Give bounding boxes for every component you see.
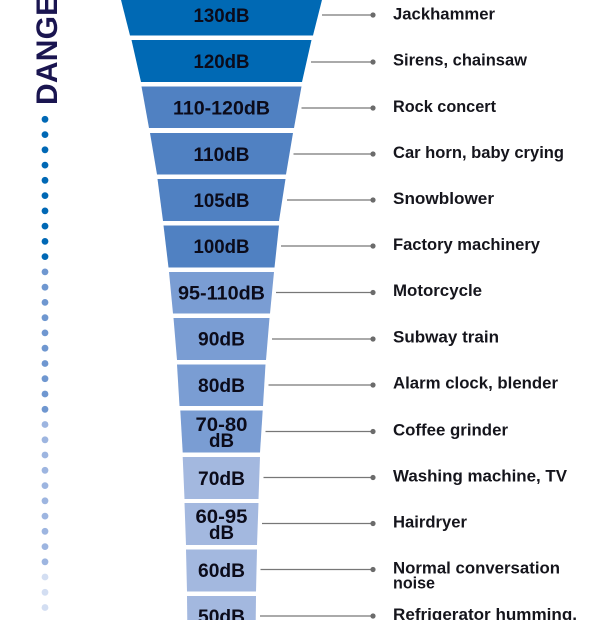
row: 110-120dB Rock concert (142, 86, 496, 128)
row: 105dB Snowblower: 105dB (194, 191, 250, 212)
row: 95-110dB Motorcycle: 95-110dB (178, 284, 265, 304)
row: 70dB Washing machine, TV (183, 457, 568, 499)
row: 70dB Washing machine, TV: Washing machine, TV (393, 466, 568, 486)
row: 110dB Car horn, baby crying: Car horn, baby crying (393, 143, 564, 162)
row: 60-95dB Hairdryer (184, 503, 467, 545)
row: 90dB Subway train: Subway train (393, 328, 499, 346)
row: 95-110dB Motorcycle (169, 272, 482, 314)
row: 70-80dB Coffee grinder: dB (209, 431, 234, 452)
row: 110-120dB Rock concert: Rock concert (393, 97, 496, 116)
row: 60-95dB Hairdryer: 60-95 (196, 507, 248, 528)
row: 60dB Normal conversation noise: noise (393, 574, 435, 592)
row: 80dB Alarm clock, blender: 80dB (198, 376, 245, 397)
row: 60dB Normal conversation noise: 60dB (198, 561, 245, 582)
row: 100dB Factory machinery: Factory machinery (393, 235, 541, 254)
row: 90dB Subway train (174, 318, 499, 360)
row: 90dB Subway train: 90dB (198, 330, 245, 350)
row: 130dB Jackhammer: 130dB (194, 6, 250, 27)
row: 80dB Alarm clock, blender (177, 364, 558, 406)
row: 60-95dB Hairdryer: dB (209, 523, 234, 544)
row: 80dB Alarm clock, blender: Alarm clock, blender (393, 374, 558, 392)
row: 110-120dB Rock concert: 110-120dB (173, 98, 270, 120)
row: 70dB Washing machine, TV: 70dB (198, 469, 245, 490)
row: 120dB Sirens, chainsaw: 120dB (194, 52, 250, 73)
row: 95-110dB Motorcycle: Motorcycle (393, 281, 482, 300)
row: 60dB Normal conversation noise: Normal conversation (393, 558, 560, 577)
row: 70-80dB Coffee grinder (180, 410, 508, 452)
row: 100dB Factory machinery (164, 226, 541, 268)
row: 70-80dB Coffee grinder: Coffee grinder (393, 420, 508, 440)
row: 120dB Sirens, chainsaw (132, 40, 528, 82)
row: 105dB Snowblower (158, 179, 494, 221)
row: 105dB Snowblower: Snowblower (393, 189, 494, 208)
row: 120dB Sirens, chainsaw: Sirens, chainsaw (393, 50, 528, 70)
row: 70-80dB Coffee grinder: 70-80 (196, 415, 248, 436)
row: 130dB Jackhammer (120, 0, 495, 36)
row: 110dB Car horn, baby crying: 110dB (194, 145, 250, 166)
row: 130dB Jackhammer: Jackhammer (393, 4, 495, 24)
row: 60dB Normal conversation noise (186, 550, 560, 592)
row: 110dB Car horn, baby crying (150, 133, 564, 174)
row: 60-95dB Hairdryer: Hairdryer (393, 512, 467, 532)
dotted scale (42, 116, 48, 611)
row: 50dB Refrigerator humming (187, 596, 577, 620)
row: 100dB Factory machinery: 100dB (194, 237, 250, 258)
